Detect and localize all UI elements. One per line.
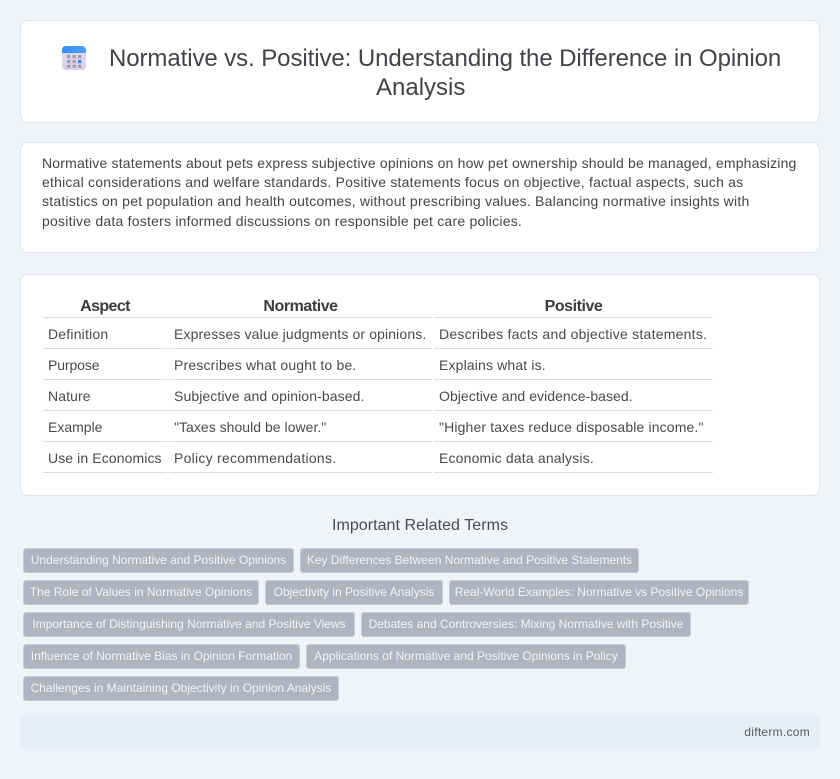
comparison table: "Taxes should be lower." <box>174 419 326 435</box>
tag <box>23 580 259 605</box>
heading: Important Related Terms: Important Related Terms <box>332 517 508 534</box>
comparison table: Subjective and opinion-based. <box>174 388 364 404</box>
tag <box>23 612 355 637</box>
tag: Debates and Controversies: Mixing Normative with Positive <box>369 617 683 631</box>
tag <box>361 612 691 637</box>
tag: Challenges in Maintaining Objectivity in Opinion Analysis <box>31 681 331 695</box>
intro paragraph: positive data fosters informed discussions on responsible pet care policies. <box>42 213 522 229</box>
row: Definition: Definition <box>48 326 108 342</box>
tag <box>306 644 626 669</box>
tag <box>23 548 294 573</box>
row: Example: Example <box>48 419 102 435</box>
intro paragraph <box>42 155 797 229</box>
tag <box>300 548 639 573</box>
tag: Real-World Examples: Normative vs Positive Opinions <box>455 585 743 599</box>
panel: intro text card <box>20 142 820 253</box>
tag group: related terms <box>23 548 749 701</box>
header: Normative: Normative <box>263 298 338 315</box>
tag: Objectivity in Positive Analysis <box>274 585 434 599</box>
comparison table: Describes facts and objective statements. <box>439 326 707 342</box>
comparison table: Policy recommendations. <box>174 450 336 466</box>
comparison table: Expresses value judgments or opinions. <box>174 326 426 342</box>
footer: site name: difterm.com <box>744 725 810 739</box>
panel: title card <box>20 20 820 123</box>
tag <box>23 676 339 701</box>
comparison table <box>43 298 713 473</box>
footer bar <box>20 715 820 749</box>
tag <box>449 580 749 605</box>
comparison table: Economic data analysis. <box>439 450 594 466</box>
intro paragraph: Normative statements about pets express subjective opinions on how pet ownership should be managed, emphasizing <box>42 155 797 171</box>
comparison table: "Higher taxes reduce disposable income." <box>439 419 704 435</box>
comparison table: Prescribes what ought to be. <box>174 357 356 373</box>
tag <box>265 580 443 605</box>
comparison table: Objective and evidence-based. <box>439 388 633 404</box>
intro paragraph: statistics on pet population and health outcomes, without prescribing values. Balancing normative insights with <box>42 193 749 209</box>
tag: The Role of Values in Normative Opinions <box>30 585 252 599</box>
tag <box>23 644 300 669</box>
row: Use in Economics: Use in Economics <box>48 450 162 466</box>
header: Positive: Positive <box>545 298 602 315</box>
row: Nature: Nature <box>48 388 91 404</box>
tag: Understanding Normative and Positive Opinions <box>31 553 286 567</box>
title: Normative vs. Positive: Understanding the Difference in Opinion <box>109 45 781 72</box>
row: Purpose: Purpose <box>48 357 99 373</box>
header: Aspect: Aspect <box>80 298 130 315</box>
panel: comparison table card <box>20 274 820 496</box>
title: Analysis <box>376 74 465 101</box>
tag: Key Differences Between Normative and Positive Statements <box>307 553 632 567</box>
icon: calendar <box>62 46 86 70</box>
comparison table: Explains what is. <box>439 357 546 373</box>
tag: Influence of Normative Bias in Opinion Formation <box>31 649 292 663</box>
title <box>109 45 781 101</box>
tag: Importance of Distinguishing Normative and Positive Views <box>32 617 346 631</box>
tag: Applications of Normative and Positive Opinions in Policy <box>314 649 618 663</box>
intro paragraph: ethical considerations and welfare standards. Positive statements focus on objective, factual aspects, such as <box>42 174 743 190</box>
